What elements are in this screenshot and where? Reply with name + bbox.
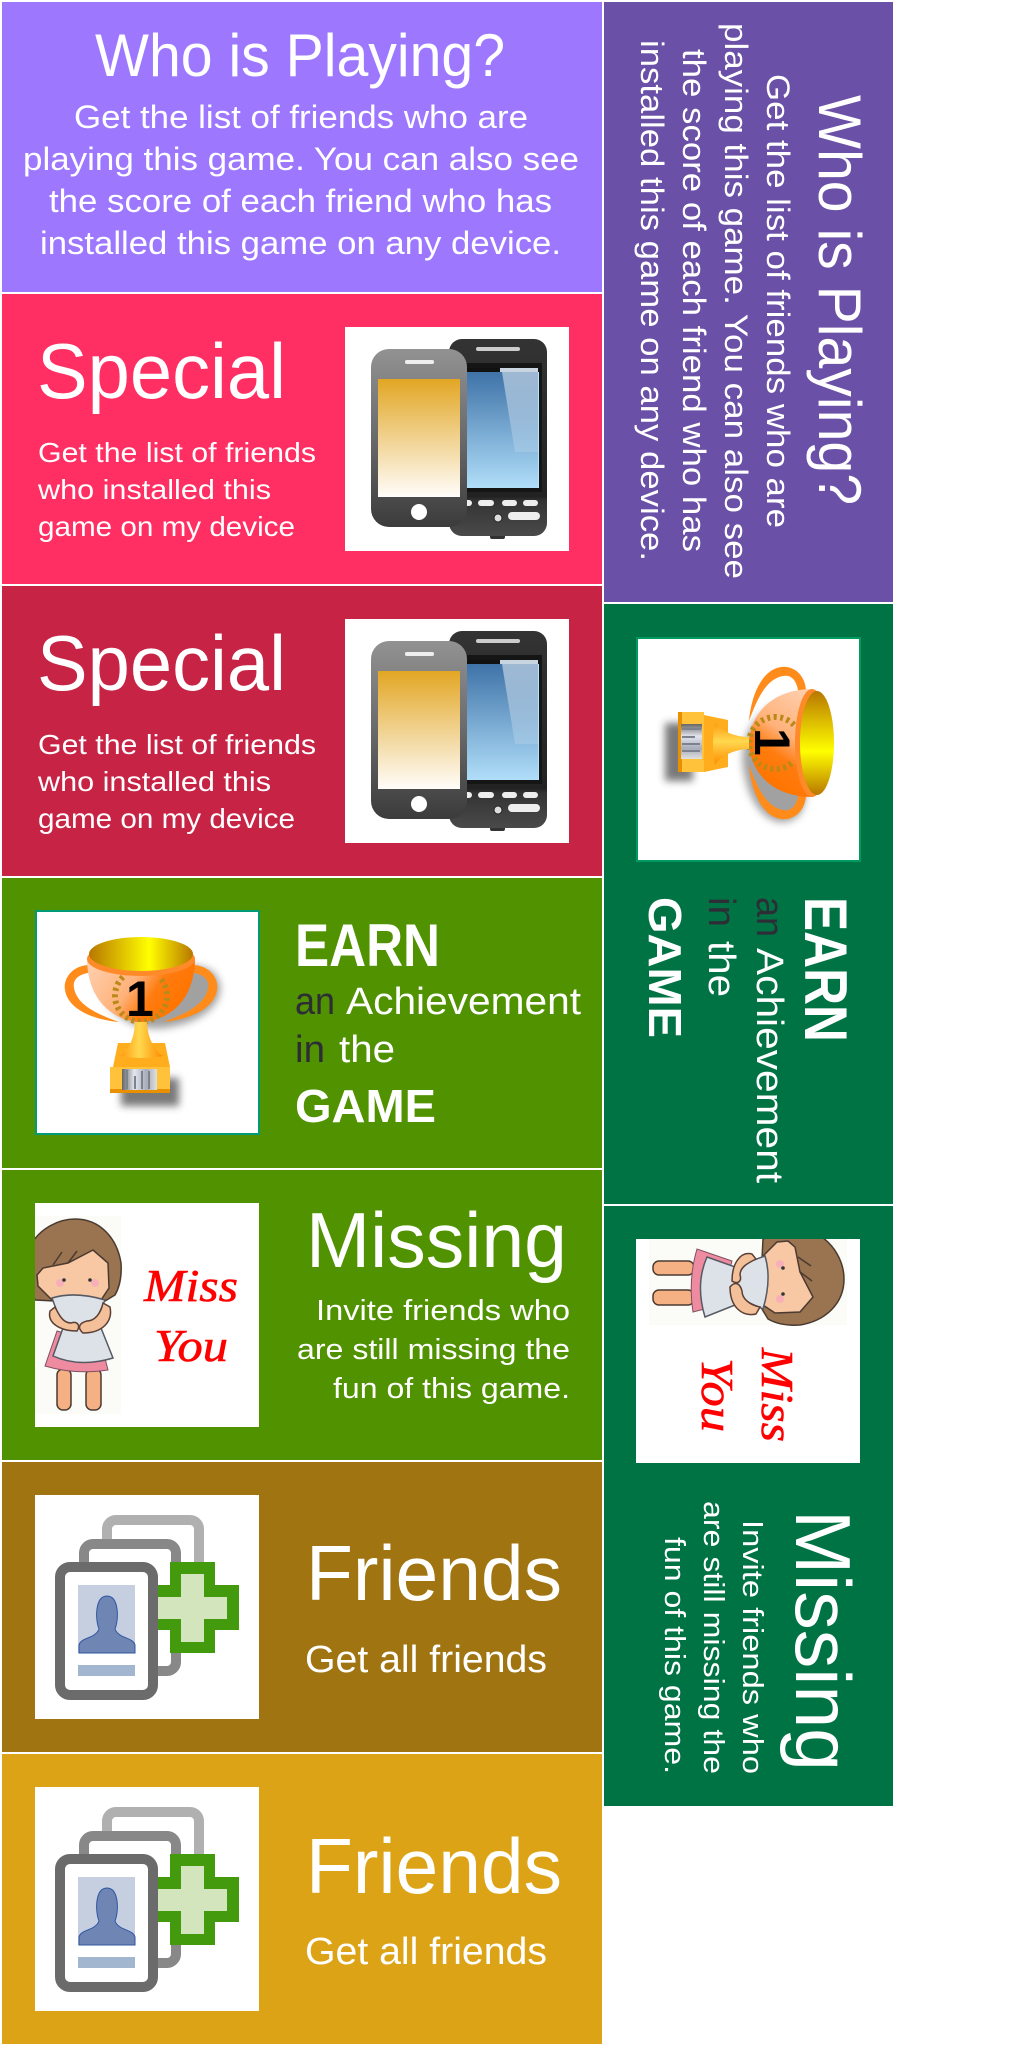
text block: an Achievement in the: an bbox=[295, 981, 335, 1023]
heading: GAME: GAME bbox=[639, 897, 691, 1038]
heading: Missing: Missing bbox=[779, 1510, 867, 1771]
text block: an Achievement in the: an bbox=[748, 897, 790, 937]
text block: special description: game on my device bbox=[38, 511, 295, 542]
text block: description: installed this game on any device. bbox=[40, 225, 561, 261]
text block: description: playing this game. You can also see bbox=[23, 141, 579, 177]
text block: invite friends bbox=[297, 1295, 570, 1405]
text block: an Achievement in the: the bbox=[339, 1029, 395, 1071]
panel: rotated Who is Playing (dark purple) bbox=[604, 2, 893, 602]
text block: special description: who installed this bbox=[37, 474, 271, 505]
text block: invite friends bbox=[658, 1501, 768, 1774]
icon: trophy bbox=[636, 637, 861, 862]
panel: Special (crimson) bbox=[2, 586, 602, 876]
heading: Special: Special bbox=[37, 619, 286, 707]
icon: girl with Miss You bbox=[636, 1233, 860, 1463]
text block: invite friends: fun of this game. bbox=[658, 1537, 690, 1774]
panel: Friends (gold) bbox=[2, 1754, 602, 2044]
icon: friends cards with plus bbox=[35, 1787, 259, 2011]
text block: description bbox=[23, 99, 579, 261]
icon: phones bbox=[345, 619, 569, 843]
text block: special description: Get the list of friends bbox=[38, 437, 316, 468]
icon: friends cards with plus bbox=[35, 1495, 259, 1719]
panel: Missing (green) bbox=[2, 1170, 602, 1460]
text block: invite friends: fun of this game. bbox=[333, 1373, 570, 1405]
panel: Earn achievement (green) bbox=[2, 878, 602, 1168]
text block: an Achievement in the: in bbox=[295, 1029, 325, 1071]
text block: description: installed this game on any device. bbox=[634, 40, 670, 561]
icon: trophy bbox=[35, 910, 260, 1135]
panel: rotated Missing (dark green) bbox=[604, 1206, 893, 1806]
panel: Special (pink) bbox=[2, 294, 602, 584]
text block: description: Get the list of friends who are bbox=[760, 74, 796, 528]
icon: trophy: 1 bbox=[126, 971, 154, 1027]
heading: Missing: Missing bbox=[306, 1196, 567, 1284]
heading: GAME: GAME bbox=[295, 1080, 436, 1132]
icon: girl with Miss You: You bbox=[154, 1320, 228, 1371]
text block: an Achievement in the: in bbox=[700, 897, 742, 927]
heading: EARN: EARN bbox=[295, 912, 440, 979]
text block: special description: who installed this bbox=[37, 766, 271, 797]
text block: special description bbox=[37, 729, 316, 834]
icon: phones bbox=[345, 327, 569, 551]
text block: description bbox=[634, 23, 796, 579]
heading: Who is Playing: Who is Playing? bbox=[806, 95, 873, 505]
text block: an Achievement in the: Achievement bbox=[346, 981, 581, 1023]
icon: trophy: 1 bbox=[744, 728, 800, 756]
icon: girl with Miss You: You bbox=[692, 1358, 743, 1432]
heading: Who is Playing: Who is Playing? bbox=[95, 22, 505, 89]
heading: Friends: Friends bbox=[306, 1822, 562, 1910]
heading: EARN: EARN bbox=[792, 897, 859, 1042]
icon: girl with Miss You: Miss bbox=[143, 1260, 238, 1311]
text block: invite friends: are still missing the bbox=[697, 1501, 729, 1774]
panel: Who is Playing (purple) bbox=[2, 2, 602, 292]
text block: an Achievement in the: Achievement bbox=[748, 948, 790, 1183]
text block: description: playing this game. You can also see bbox=[718, 23, 754, 579]
text block: description: Get the list of friends who are bbox=[74, 99, 528, 135]
text block: description: the score of each friend who has bbox=[676, 49, 712, 552]
text block: invite friends: Invite friends who bbox=[736, 1520, 768, 1774]
text block: special description: Get the list of friends bbox=[38, 729, 316, 760]
text block: special description bbox=[37, 437, 316, 542]
text block: an Achievement in the bbox=[295, 981, 581, 1071]
panel: rotated Earn achievement (dark green) bbox=[604, 604, 893, 1204]
icon: girl with Miss You bbox=[29, 1203, 259, 1427]
text block: an Achievement in the: the bbox=[700, 941, 742, 997]
panel: Friends (brown) bbox=[2, 1462, 602, 1752]
text block: an Achievement in the bbox=[700, 897, 790, 1183]
text block: get all friends: Get all friends bbox=[305, 1639, 547, 1681]
icon: girl with Miss You: Miss bbox=[752, 1347, 803, 1442]
text block: description: the score of each friend who has bbox=[49, 183, 552, 219]
heading: Friends: Friends bbox=[306, 1529, 562, 1617]
text block: invite friends: Invite friends who bbox=[316, 1295, 570, 1327]
text block: get all friends: Get all friends bbox=[305, 1931, 547, 1973]
heading: Special: Special bbox=[37, 327, 286, 415]
text block: invite friends: are still missing the bbox=[297, 1334, 570, 1366]
text block: special description: game on my device bbox=[38, 803, 295, 834]
